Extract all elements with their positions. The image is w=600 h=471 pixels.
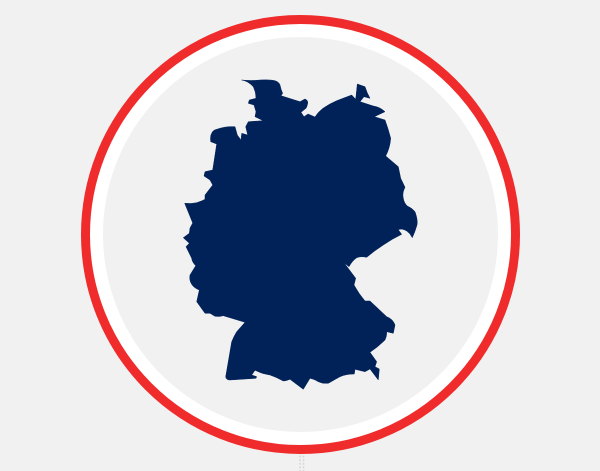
map: Germany silhouette (183, 80, 417, 389)
ring: red outer, white inner (86, 20, 516, 450)
connector: dotted line below ring (300, 452, 304, 471)
